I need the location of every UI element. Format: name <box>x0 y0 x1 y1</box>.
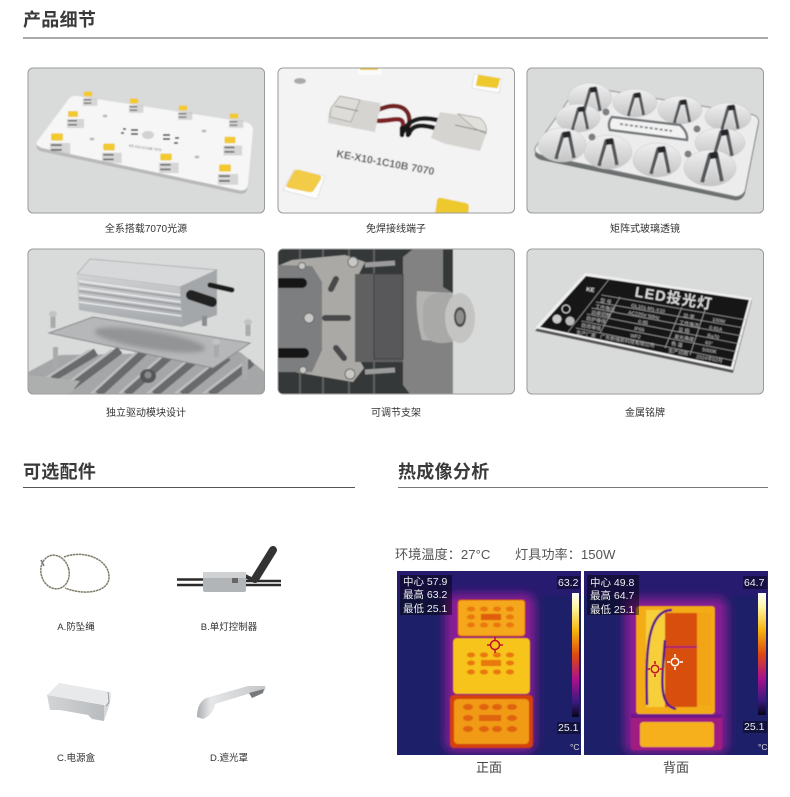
right connector <box>431 112 486 151</box>
panel: driver module <box>28 249 265 394</box>
panel frame 6 <box>527 249 764 394</box>
background fins <box>299 249 375 394</box>
thermal image: back <box>584 571 768 755</box>
label 正面: 正面 <box>476 760 502 775</box>
left connector <box>328 96 380 132</box>
metal plate <box>535 273 752 370</box>
accessory D: light shield <box>197 686 265 719</box>
wires <box>372 106 437 135</box>
ambient temperature text: 环境温度：27°C <box>395 547 491 562</box>
caption 4: 独立驱动模块设计 <box>106 406 186 419</box>
board centre marks <box>90 114 206 158</box>
caption 1: 全系搭载7070光源 <box>105 222 187 235</box>
label B: B.单灯控制器 <box>201 621 258 633</box>
pivot knob <box>417 291 475 343</box>
panel frame 1 <box>28 68 264 213</box>
nameplate spec rows: 色 温 <box>671 340 683 349</box>
driver box <box>77 259 232 327</box>
caption 6: 金属铭牌 <box>625 406 665 419</box>
nameplate spec rows: 广东新维斯科技有限公司 <box>600 333 655 350</box>
nameplate spec rows: 生产日期 <box>668 347 689 357</box>
colour bar: °C <box>758 742 768 752</box>
centre window <box>588 108 700 158</box>
mounting plate <box>49 317 250 368</box>
nameplate spec rows: 5000K <box>702 347 718 356</box>
label A: A.防坠绳 <box>57 621 95 633</box>
heat sink <box>28 350 265 394</box>
readout: 中心 57.9 <box>403 575 448 588</box>
readout <box>400 575 452 615</box>
nameplate spec rows: 防护等级 <box>586 315 607 325</box>
heading: 可选配件: 可选配件 <box>23 462 96 482</box>
nameplate spec rows: 0.91A <box>709 325 723 333</box>
crosshair <box>487 637 503 653</box>
panel: lens <box>527 68 764 213</box>
nameplate spec rows: 功 率 <box>683 312 695 321</box>
colour bar: 25.1 <box>558 722 579 734</box>
nameplate spec rows: 发光角度 <box>674 333 695 343</box>
readout: 最高 64.7 <box>590 589 635 602</box>
caption 5: 可调节支架 <box>371 407 421 419</box>
nameplate spec rows: 60° <box>705 340 713 347</box>
slots and rods <box>278 279 348 358</box>
nameplate spec rows: 工作电流 <box>679 319 700 329</box>
panel frame 3 <box>527 68 764 213</box>
screws <box>49 311 252 380</box>
readout: 最高 63.2 <box>403 588 448 601</box>
nameplate spec rows: WF2 <box>630 333 641 341</box>
clamp plate <box>278 265 322 372</box>
lens cups <box>538 83 751 186</box>
label 背面: 背面 <box>663 760 689 775</box>
colour bar: 63.2 <box>558 577 579 589</box>
nameplate spec rows: Ra70 <box>707 333 720 341</box>
colour bar <box>743 576 768 752</box>
readout: 最低 25.1 <box>590 603 635 616</box>
thermal blocks <box>450 600 533 748</box>
crosshairs <box>647 654 683 677</box>
panel: LED board <box>28 68 264 213</box>
nameplate spec rows: 生产厂家 <box>576 329 597 339</box>
bolts <box>298 257 358 379</box>
LED chips <box>50 91 243 185</box>
metal plate: KE <box>586 287 595 294</box>
colour bar: °C <box>570 742 580 752</box>
nameplate spec rows: 显 指 <box>678 326 690 335</box>
accessory B: controller <box>177 550 281 592</box>
panel frame 5 <box>278 249 514 394</box>
colour bar: 64.7 <box>744 577 765 589</box>
heading: 热成像分析: 热成像分析 <box>398 461 490 482</box>
housing <box>403 249 453 394</box>
nameplate spec rows: 2024年02月 <box>696 353 723 365</box>
readout <box>587 575 639 616</box>
window <box>355 274 403 362</box>
label D: D.遮光罩 <box>210 752 248 764</box>
nameplate spec rows: 型 号 <box>600 297 612 306</box>
back body <box>631 606 722 750</box>
lamp power text: 灯具功率：150W <box>515 546 616 562</box>
panel frame 2 <box>278 68 514 213</box>
panel: connectors <box>278 62 514 215</box>
bracket arms <box>365 263 395 372</box>
nameplate spec rows: 工作电压 <box>595 303 616 313</box>
heading: 产品细节: 产品细节 <box>23 10 96 30</box>
caption 3: 矩阵式玻璃透镜 <box>610 222 680 235</box>
nameplate spec rows: AC220V 50Hz <box>628 310 660 322</box>
accessory C: power box <box>47 683 111 721</box>
metal plate: LED投光灯 <box>634 283 714 313</box>
colour bar <box>557 576 580 752</box>
bracket plate <box>280 255 365 382</box>
caption 2: 免焊接线端子 <box>366 222 426 235</box>
panel frame 4 <box>28 249 264 394</box>
readout: 最低 25.1 <box>403 602 448 615</box>
thermal holes <box>463 606 517 732</box>
nameplate spec rows: 功率因数 <box>591 309 612 319</box>
LED chips close-up <box>283 62 502 215</box>
nameplate spec rows: 防雨等级 <box>581 322 602 332</box>
readout: 中心 49.8 <box>590 576 635 589</box>
nameplate spec rows <box>576 297 726 365</box>
nameplate spec rows: 100W <box>712 317 726 325</box>
lens reflectors <box>556 88 738 182</box>
nameplate spec rows: GL101-M1-X10 <box>631 303 666 315</box>
board centre marks: KE-X10-1C10B 7070 <box>129 144 162 152</box>
nameplate spec rows: IP66 <box>634 326 645 334</box>
colour bar: 25.1 <box>744 721 765 733</box>
panel: nameplate <box>527 249 764 394</box>
thermal image: front <box>397 571 581 755</box>
accessory A: safety rope <box>37 552 109 592</box>
label C: C.电源盒 <box>57 752 95 764</box>
board marking: KE-X10-1C10B 7070 <box>335 148 435 178</box>
nameplate spec rows: 0.95 <box>638 319 648 327</box>
panel: bracket <box>278 249 515 394</box>
